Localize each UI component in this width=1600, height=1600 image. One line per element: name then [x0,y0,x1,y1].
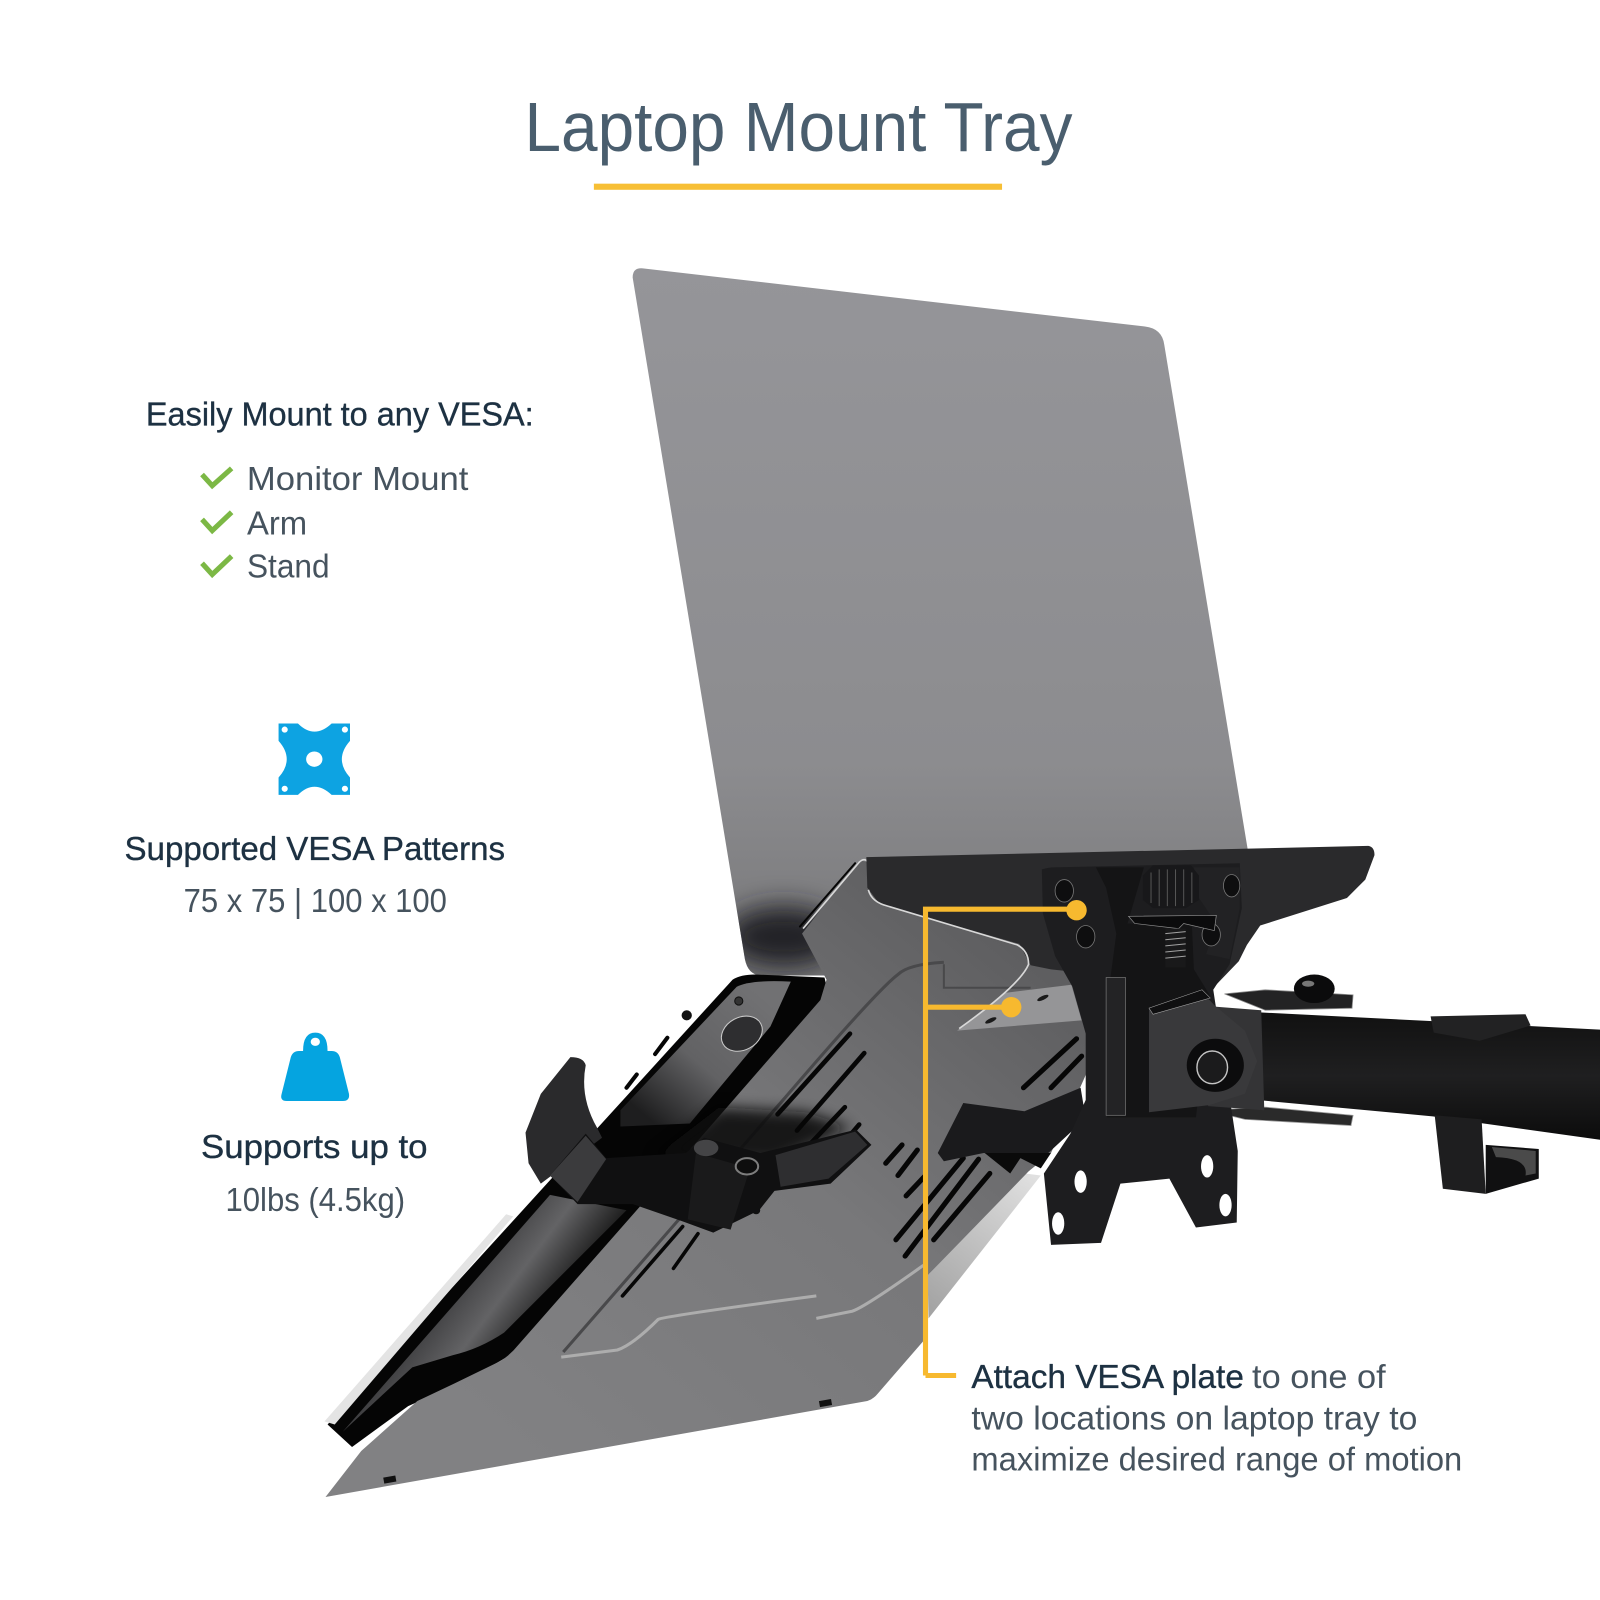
supports up to text: Supports up to [201,1129,428,1166]
tray outline highlight [803,860,868,929]
tray bottom sliver [928,1173,1041,1318]
callout leader lines [926,900,1087,1376]
title underline [594,184,1002,190]
tray embossed lines [561,962,1031,1357]
list item: monitor mount: Monitor Mount [247,461,469,498]
callout dot lower [1001,997,1021,1017]
hinge bracket [1106,978,1264,1115]
supported VESA patterns text [124,831,505,920]
laptop pale edge [324,1214,513,1424]
supported VESA patterns text: 75 x 75 | 100 x 100 [184,883,447,920]
left clamp rail [550,1130,871,1233]
icon: VESA plate [279,723,350,795]
flange shelf [866,846,1374,987]
list item: arm [202,506,307,543]
callout dot upper [1066,900,1087,920]
title: Laptop Mount Tray [524,88,1073,166]
callout text: attach VESA plate: Attach VESA plate [971,1359,1244,1396]
lid shadow near tray [724,906,843,967]
laptop base lower panel [343,1195,627,1432]
plate screws [1055,874,1240,948]
support arm [1208,974,1600,1194]
callout text: attach VESA plate: two locations on laptop tray to [971,1401,1417,1438]
rail shadow [653,1107,852,1163]
tray ventilation slots [622,1034,1082,1296]
tray corner marks [383,1399,832,1484]
laptop base upper panel [620,981,791,1127]
product photo: laptop on VESA tray and arm [324,268,1600,1497]
icon: weight [281,1033,349,1101]
list item: arm: Arm [247,506,307,543]
list item: stand [202,549,330,586]
tray lit inset with holes [957,985,1082,1031]
heading: Easily Mount to any VESA: [146,397,534,434]
supports up to text [201,1129,428,1219]
callout text: attach VESA plate: to one of [1252,1359,1386,1396]
VESA plate [1042,863,1242,1245]
right clamp rail [938,1088,1086,1173]
text block: easily mount [146,397,534,586]
callout text: attach VESA plate: maximize desired range of motion [971,1441,1462,1478]
tray plate [326,860,1092,1497]
list item: stand: Stand [247,549,330,586]
callout text: attach VESA plate [971,1359,1462,1478]
knurled knob and thread [1129,865,1216,967]
laptop lid [633,268,1249,976]
supports up to text: 10lbs (4.5kg) [226,1182,405,1219]
laptop clamp hook [526,1057,602,1184]
laptop ports [627,997,768,1088]
laptop base silhouette [328,974,829,1447]
supported VESA patterns text: Supported VESA Patterns [124,831,505,868]
